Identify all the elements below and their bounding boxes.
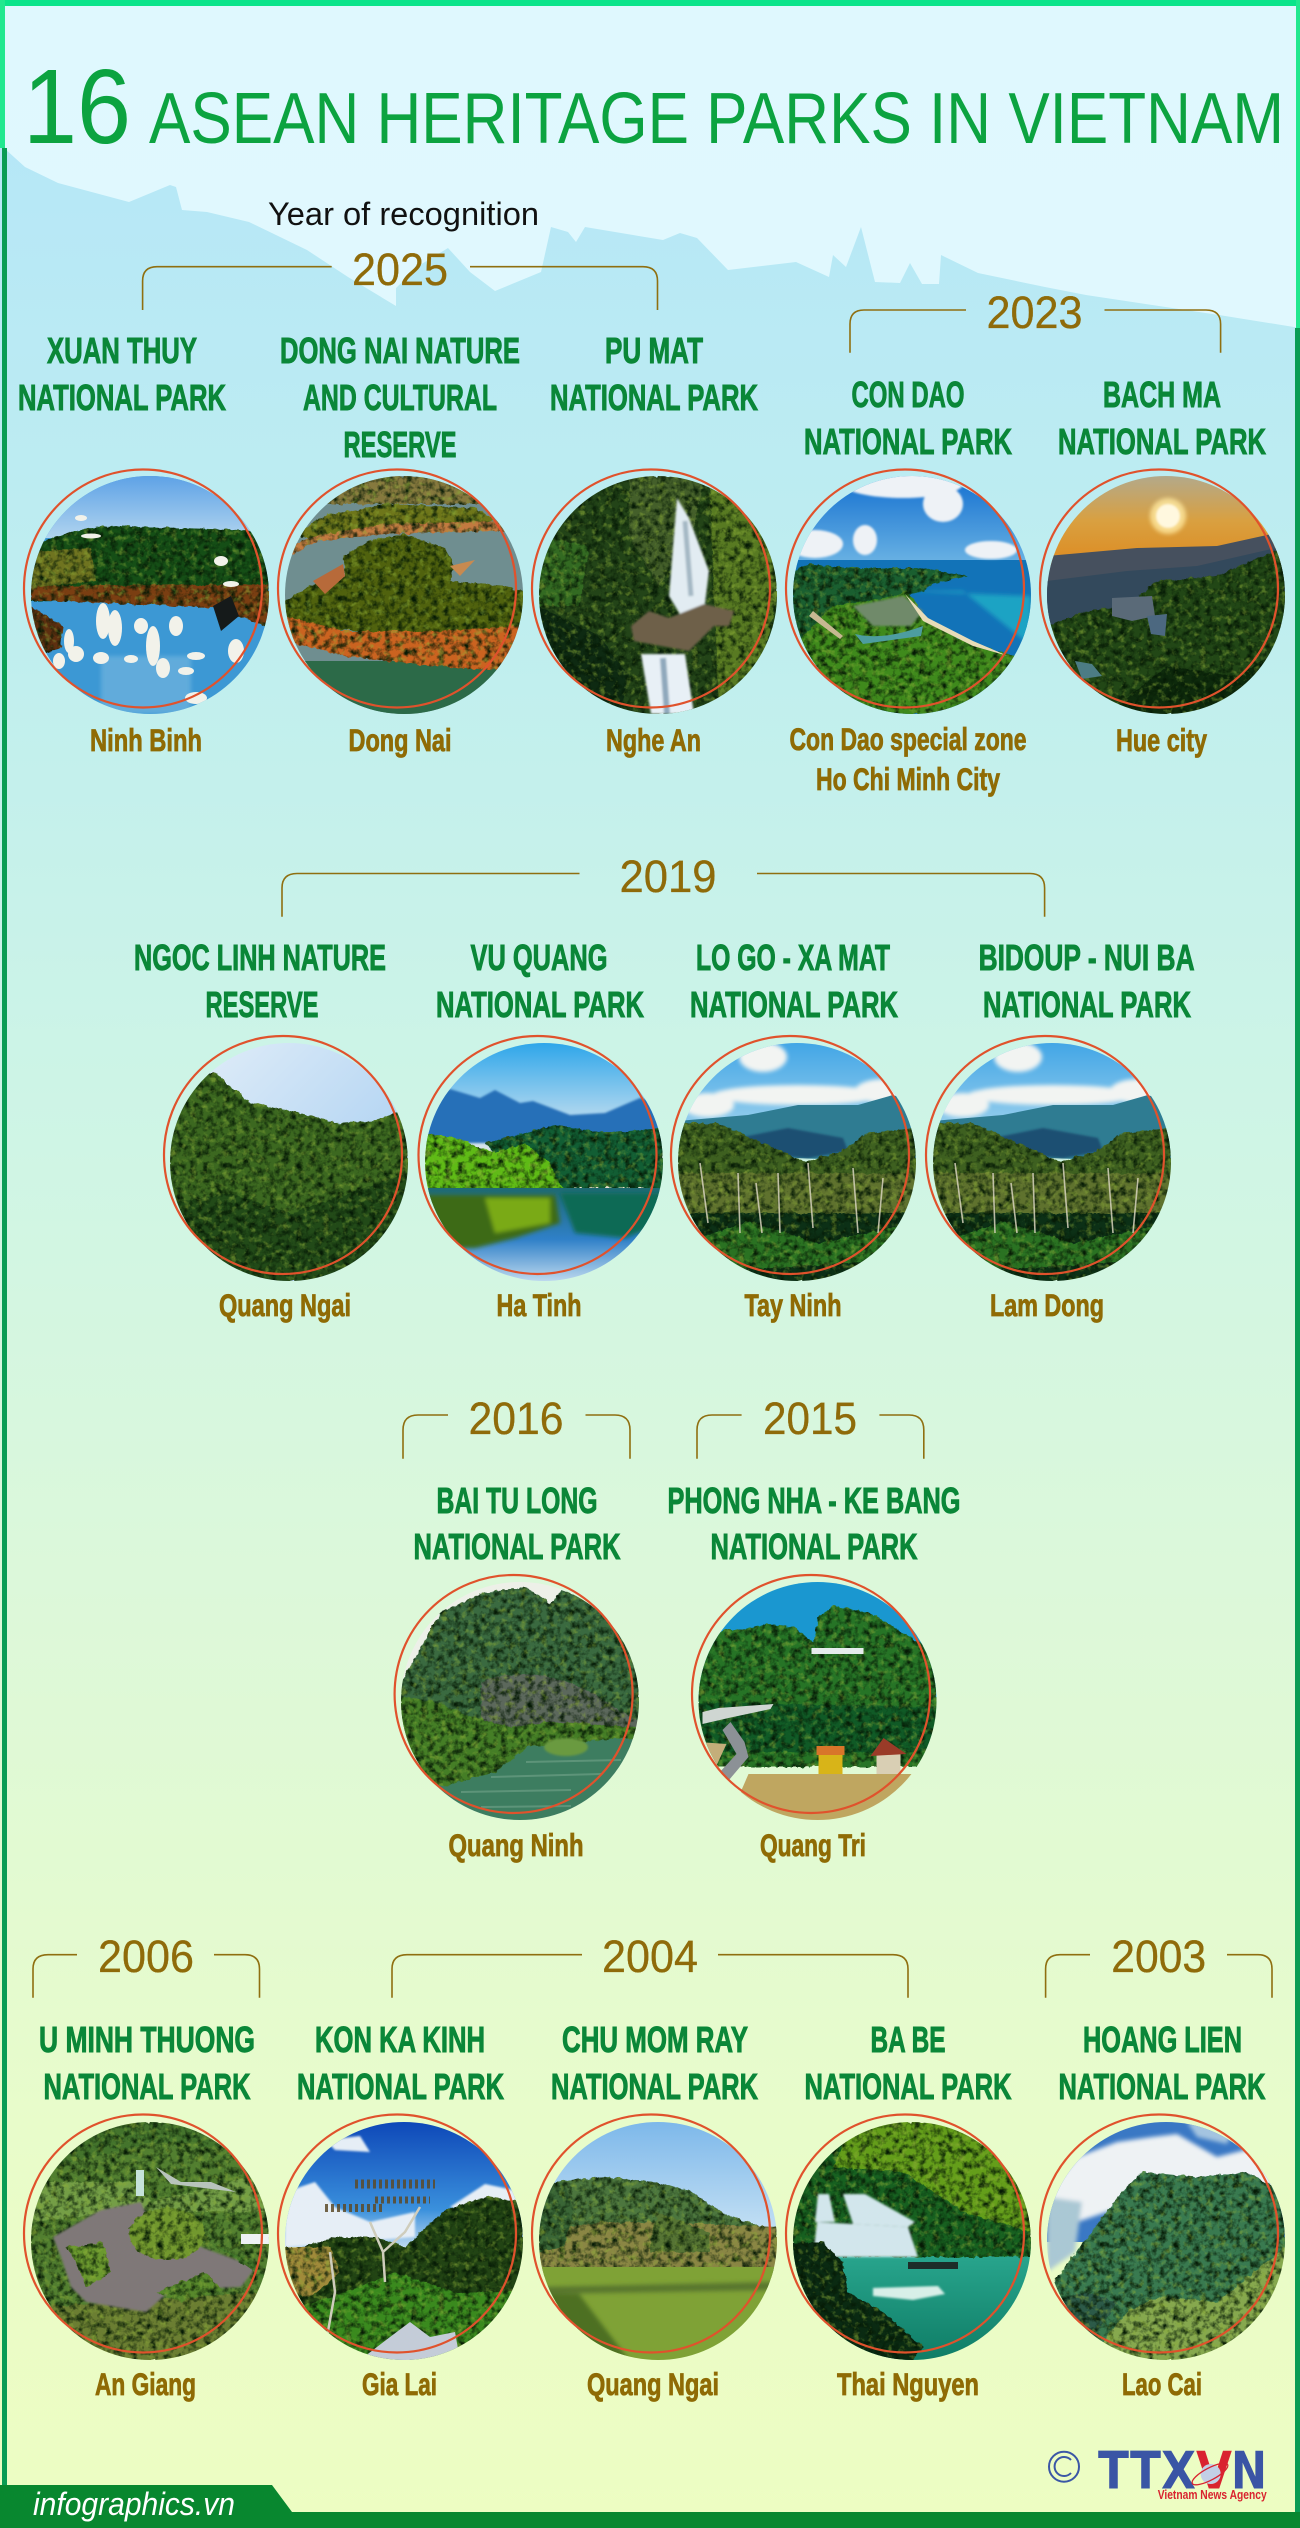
name: Bidoup - Nui Ba: BIDOUP - NUI BA (979, 937, 1195, 978)
name: Xuan Thuy: NATIONAL PARK (18, 377, 226, 418)
name: Xuan Thuy (18, 330, 226, 418)
name: Kon Ka Kinh: NATIONAL PARK (297, 2066, 504, 2107)
name: Pu Mat: NATIONAL PARK (550, 377, 758, 418)
park: Con Dao (786, 374, 1031, 797)
photo: Bai Tu Long (401, 1582, 639, 1820)
province: Hue city: Hue city (1116, 722, 1207, 758)
name: Vu Quang (436, 937, 644, 1025)
park: Phong Nha - Ke Bang (668, 1480, 960, 1863)
name: Bach Ma: BACH MA (1103, 374, 1221, 415)
province: Quang Tri: Quang Tri (760, 1827, 866, 1863)
name: Ba Be: NATIONAL PARK (804, 2066, 1012, 2107)
name: U Minh Thuong: U MINH THUONG (39, 2019, 255, 2060)
province: Quang Ngai: Quang Ngai (587, 2366, 719, 2402)
province: Ha Tinh: Ha Tinh (496, 1287, 582, 1323)
photo: Lo Go - Xa Mat (678, 1042, 916, 1281)
photo: Kon Ka Kinh (285, 2122, 523, 2360)
province: Quang Ngai: Quang Ngai (219, 1287, 351, 1323)
name: Bidoup - Nui Ba (979, 937, 1195, 1025)
icon: copyright (1049, 2452, 1079, 2482)
logo: TTXVN: Vietnam News Agency (1158, 2487, 1267, 2502)
title (23, 48, 1284, 166)
name: Ngoc Linh (134, 937, 386, 1025)
name: Bidoup - Nui Ba: NATIONAL PARK (983, 984, 1191, 1025)
province: Quang Ninh: Quang Ninh (448, 1827, 584, 1863)
ring (24, 2114, 262, 2352)
year bracket: 2006: 2006 (98, 1931, 194, 1982)
year bracket: 2019 (282, 851, 1045, 917)
ring (418, 1036, 656, 1274)
name: Phong Nha - Ke Bang (668, 1480, 960, 1567)
photo: Phong Nha - Ke Bang (698, 1582, 936, 1820)
ring (786, 2114, 1024, 2352)
photo: Chu Mom Ray (539, 2122, 777, 2360)
province: Gia Lai: Gia Lai (362, 2366, 437, 2402)
park: Bai Tu Long (395, 1480, 639, 1863)
name: Lo Go - Xa Mat: LO GO - XA MAT (696, 937, 890, 978)
year bracket: 2016 (403, 1393, 630, 1459)
province: Con Dao (790, 721, 1026, 797)
ring (532, 2114, 770, 2352)
name: Chu Mom Ray: NATIONAL PARK (551, 2066, 758, 2107)
province: Con Dao: Con Dao special zone (790, 721, 1026, 757)
photo: Bach Ma (1047, 476, 1285, 714)
name: Pu Mat (550, 330, 758, 418)
photo: Vu Quang (425, 1043, 663, 1281)
year bracket: 2004 (392, 1931, 908, 1998)
year bracket: 2004: 2004 (602, 1931, 698, 1982)
photo: U Minh Thuong (31, 2122, 269, 2360)
province: Lam Dong: Lam Dong (990, 1287, 1104, 1323)
park: Chu Mom Ray (532, 2019, 777, 2402)
ring (164, 1036, 402, 1274)
name: Chu Mom Ray: CHU MOM RAY (562, 2019, 748, 2060)
year bracket: 2016: 2016 (468, 1393, 564, 1444)
name: Vu Quang: VU QUANG (470, 937, 608, 978)
logo: TTXVN: V (1196, 2442, 1232, 2502)
year bracket: 2006 (33, 1931, 260, 1998)
name: Xuan Thuy: XUAN THUY (47, 330, 197, 371)
province: Lao Cai: Lao Cai (1122, 2366, 1202, 2402)
province: Thai Nguyen: Thai Nguyen (837, 2366, 979, 2402)
ring (1040, 470, 1278, 708)
name: Bai Tu Long: NATIONAL PARK (414, 1526, 620, 1567)
park: Vu Quang (418, 937, 663, 1323)
name: Kon Ka Kinh (297, 2019, 504, 2107)
subtitle: year of recognition: Year of recognition (268, 196, 539, 232)
province: Con Dao: Ho Chi Minh City (816, 761, 1000, 797)
ring (532, 470, 770, 708)
name: Vu Quang: NATIONAL PARK (436, 984, 644, 1025)
year bracket: 2003: 2003 (1111, 1931, 1206, 1982)
province: Dong Nai: Dong Nai (348, 722, 452, 758)
logo: TTXVN: N (1231, 2442, 1267, 2502)
name: Pu Mat: PU MAT (605, 330, 703, 371)
name: Ngoc Linh: RESERVE (206, 984, 318, 1025)
park: Xuan Thuy (18, 330, 269, 758)
photo: Pu Mat (539, 476, 777, 714)
name: Dong Nai: DONG NAI NATURE (280, 330, 520, 371)
year bracket: 2003 (1046, 1931, 1272, 1998)
year bracket: 2023: 2023 (986, 287, 1082, 338)
photo: Dong Nai (285, 476, 523, 714)
name: Ngoc Linh: NGOC LINH NATURE (134, 937, 386, 978)
province: Ninh Binh: Ninh Binh (90, 722, 202, 758)
footer source: infographics.vn: infographics.vn (33, 2486, 235, 2522)
park: Dong Nai (278, 330, 523, 758)
ring (671, 1036, 909, 1274)
name: Con Dao: NATIONAL PARK (804, 421, 1012, 462)
logo: TTXVN (1098, 2442, 1267, 2502)
photo: Con Dao (787, 470, 1031, 714)
park: Bidoup - Nui Ba (926, 937, 1195, 1323)
name: U Minh Thuong: NATIONAL PARK (44, 2066, 250, 2107)
name: Dong Nai: RESERVE (344, 424, 456, 465)
name: Ba Be (804, 2019, 1012, 2107)
park: Bach Ma (1040, 374, 1285, 758)
name: U Minh Thuong (39, 2019, 255, 2107)
park: Pu Mat (532, 330, 777, 758)
ring (1040, 2114, 1278, 2352)
name: Con Dao (804, 374, 1012, 462)
ring (395, 1575, 633, 1813)
name: Phong Nha - Ke Bang: NATIONAL PARK (710, 1526, 918, 1567)
ring (278, 2114, 516, 2352)
province: Tay Ninh: Tay Ninh (744, 1287, 842, 1323)
year bracket: 2023 (850, 287, 1221, 353)
year bracket: 2025 (143, 244, 658, 310)
year bracket: 2025: 2025 (352, 244, 448, 295)
name: Ba Be: BA BE (870, 2019, 946, 2060)
name: Chu Mom Ray (551, 2019, 758, 2107)
park: Hoang Lien (1040, 2019, 1285, 2402)
park: Lo Go - Xa Mat (671, 937, 916, 1323)
park: Ngoc Linh (134, 937, 408, 1323)
name: Con Dao: CON DAO (852, 374, 964, 415)
name: Lo Go - Xa Mat (690, 937, 898, 1025)
year bracket: 2019: 2019 (620, 851, 716, 902)
title: 16 (23, 48, 131, 166)
ring (926, 1036, 1164, 1274)
name: Kon Ka Kinh: KON KA KINH (315, 2019, 485, 2060)
ring (692, 1575, 930, 1813)
year bracket: 2015: 2015 (763, 1393, 857, 1444)
province: Nghe An: Nghe An (606, 722, 701, 758)
ring (24, 470, 262, 708)
park: Ba Be (786, 2019, 1031, 2402)
name: Bach Ma (1058, 374, 1266, 462)
ring (278, 470, 516, 708)
name: Bai Tu Long (414, 1480, 620, 1567)
name: Dong Nai (280, 330, 520, 465)
logo: TTXVN: TTX (1098, 2442, 1196, 2502)
photo: Xuan Thuy (31, 476, 269, 714)
photo: Ba Be (793, 2122, 1031, 2360)
name: Dong Nai: AND CULTURAL (303, 377, 497, 418)
photo: Ngoc Linh (170, 1043, 408, 1281)
name: Bai Tu Long: BAI TU LONG (436, 1480, 598, 1521)
year bracket: 2015 (697, 1393, 924, 1459)
park: U Minh Thuong (24, 2019, 269, 2402)
ring (786, 470, 1024, 708)
name: Hoang Lien (1058, 2019, 1266, 2107)
name: Lo Go - Xa Mat: NATIONAL PARK (690, 984, 898, 1025)
photo: Hoang Lien (1047, 2122, 1285, 2360)
park: Kon Ka Kinh (278, 2019, 523, 2402)
province: An Giang: An Giang (95, 2366, 196, 2402)
name: Phong Nha - Ke Bang: PHONG NHA - KE BANG (668, 1480, 960, 1521)
footer band (0, 2485, 1300, 2528)
photo: Bidoup - Nui Ba (933, 1042, 1171, 1281)
